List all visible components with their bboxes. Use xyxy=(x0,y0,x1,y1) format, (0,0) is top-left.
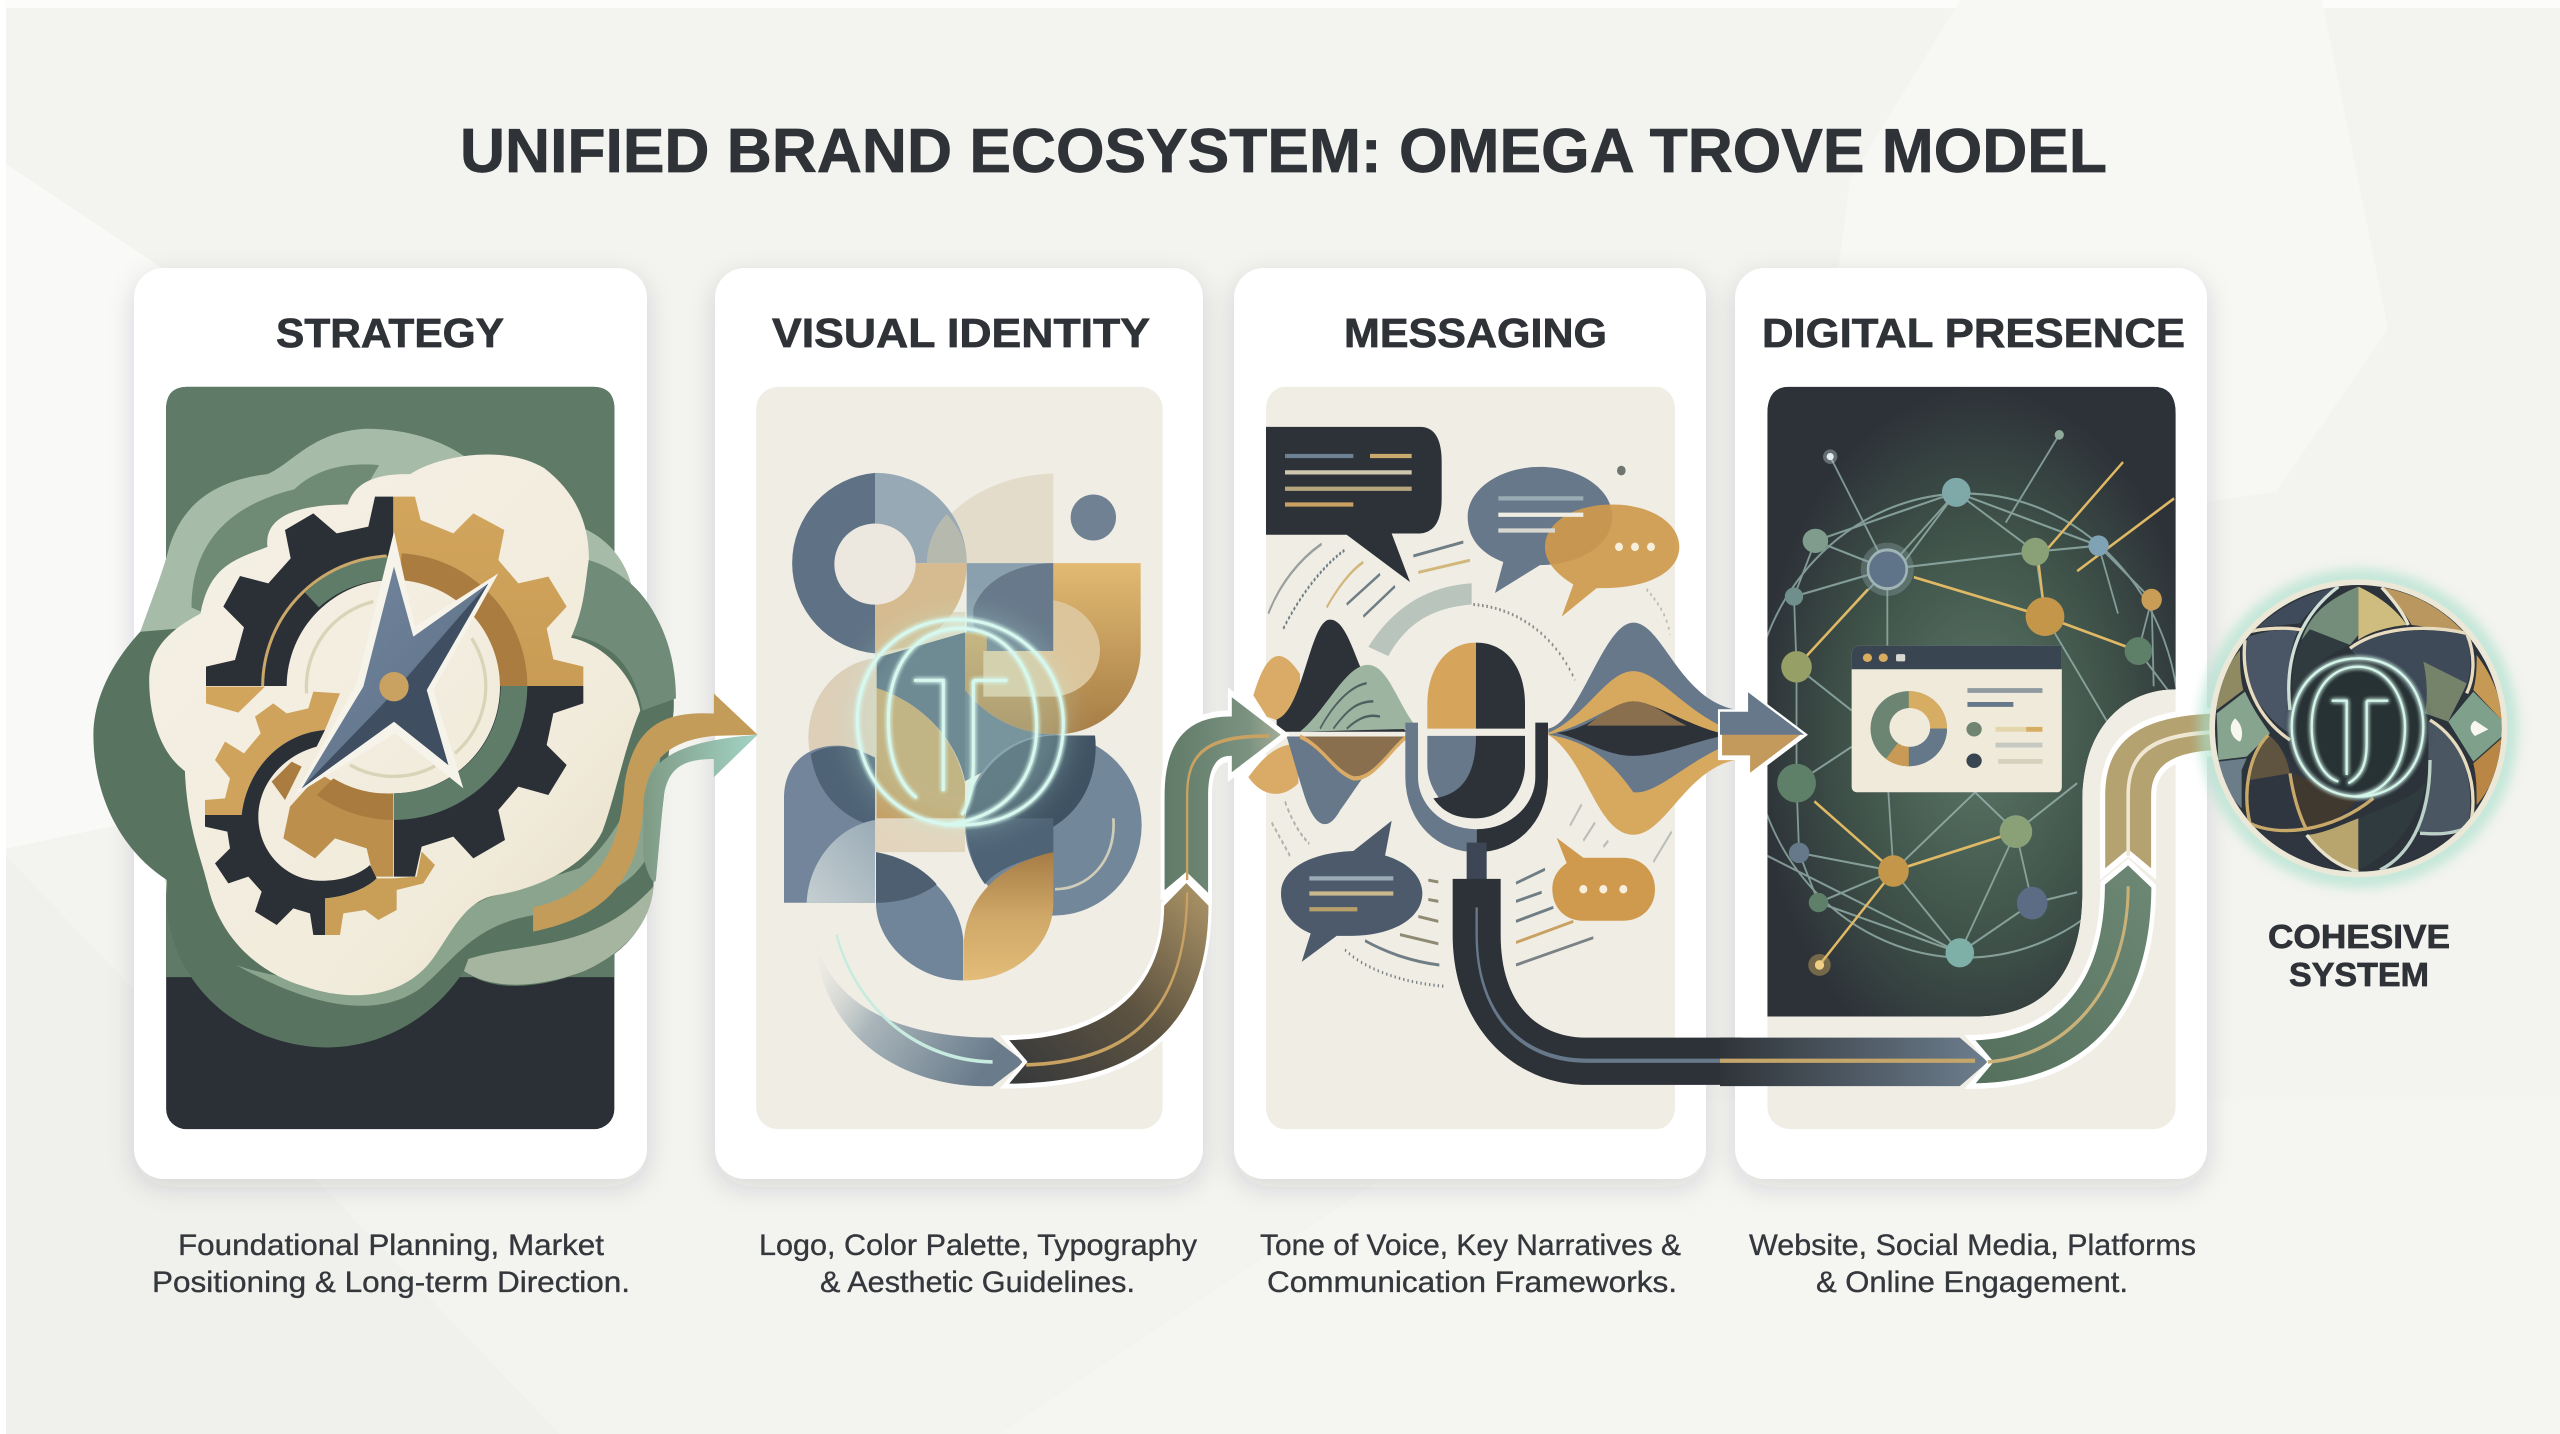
label: cohesive system: COHESIVE xyxy=(2268,918,2450,955)
arrow: visual identity to messaging xyxy=(1163,692,1285,898)
caption: visual identity: Logo, Color Palette, Typography xyxy=(759,1229,1197,1262)
label: cohesive system: SYSTEM xyxy=(2289,956,2429,993)
caption: digital presence xyxy=(1749,1229,2196,1299)
caption: digital presence: Website, Social Media, Platforms xyxy=(1749,1229,2196,1262)
illustration: visual identity background xyxy=(756,387,1163,1129)
panel: messaging card xyxy=(1234,268,1706,1179)
arrow: microphone cable to digital xyxy=(1720,1038,1988,1086)
caption: visual identity xyxy=(759,1229,1197,1299)
caption: visual identity: & Aesthetic Guidelines. xyxy=(820,1266,1135,1299)
title: UNIFIED BRAND ECOSYSTEM: OMEGA TROVE MODEL xyxy=(460,117,2107,186)
arrow: strategy to visual identity xyxy=(533,694,758,932)
chart: right sound wave xyxy=(1548,623,1742,835)
arrow: gold band into orb xyxy=(2103,710,2235,874)
icon: neon logo xyxy=(850,614,1070,830)
heading: digital presence: DIGITAL PRESENCE xyxy=(1762,310,2185,356)
chart: network globe xyxy=(1751,387,2179,1017)
illustration: messaging xyxy=(1248,387,1742,1129)
big gear xyxy=(206,497,583,877)
panel: visual identity card xyxy=(715,268,1203,1179)
illustration: strategy xyxy=(93,387,758,1129)
icon: dark speech bubble xyxy=(1266,427,1442,582)
heading: strategy: STRATEGY xyxy=(276,310,504,356)
icon: compass star xyxy=(295,532,498,795)
chart: left sound wave xyxy=(1248,620,1418,824)
strategy panel and cloud xyxy=(93,387,676,1129)
icon: small slate speech bubble xyxy=(1281,821,1422,962)
arrow: wave to digital presence xyxy=(1720,692,1804,777)
arrow: sweep to dark band xyxy=(815,880,1210,1086)
heading: messaging: MESSAGING xyxy=(1344,310,1607,356)
caption: strategy: Positioning & Long-term Direction. xyxy=(152,1266,630,1299)
heading: visual identity: VISUAL IDENTITY xyxy=(772,310,1150,356)
caption: strategy xyxy=(152,1229,630,1299)
caption: messaging: Tone of Voice, Key Narratives & xyxy=(1260,1229,1681,1262)
panel: digital presence card xyxy=(1735,268,2207,1179)
caption: digital presence: & Online Engagement. xyxy=(1816,1266,2128,1299)
icon: microphone xyxy=(1412,643,1742,1085)
donut chart xyxy=(1871,691,1947,766)
small gear xyxy=(205,692,435,935)
illustration: visual identity geometric shapes xyxy=(784,473,1142,981)
illustration: digital presence xyxy=(1720,387,2235,1129)
orb: cohesive system xyxy=(2198,568,2518,888)
decorative sound arcs xyxy=(1268,542,1672,986)
caption: messaging: Communication Frameworks. xyxy=(1267,1266,1677,1299)
caption: messaging xyxy=(1260,1229,1681,1299)
icon: blue and gold speech bubbles xyxy=(1468,467,1679,617)
gears and compass xyxy=(205,497,583,935)
arrow: green band up xyxy=(1970,862,2154,1086)
label: cohesive system xyxy=(2268,918,2450,993)
icon: browser window with donut chart xyxy=(1852,646,2062,792)
icon: small gold speech bubble xyxy=(1552,838,1655,921)
caption: strategy: Foundational Planning, Market xyxy=(178,1229,605,1262)
panel: strategy card xyxy=(134,268,647,1179)
network nodes xyxy=(1777,430,2162,970)
icon: neon logo in orb xyxy=(2292,658,2423,797)
